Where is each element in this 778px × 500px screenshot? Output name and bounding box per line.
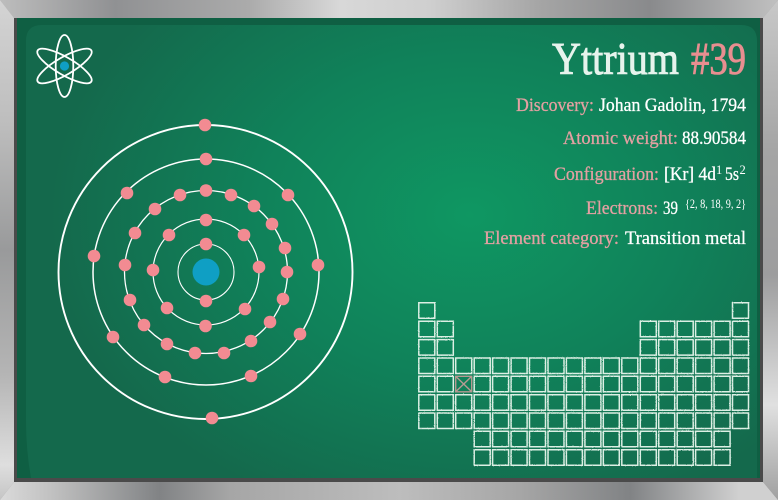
fact: atomic weight: Atomic weight: <box>563 128 678 149</box>
fact: atomic weight <box>563 128 746 149</box>
fact: configuration: 2 <box>740 163 746 177</box>
fact: configuration: Configuration: <box>554 164 659 185</box>
icon: atom <box>33 35 96 97</box>
fact: discovery <box>516 95 746 116</box>
shell 5 electrons <box>199 119 218 424</box>
fact: electrons: Electrons: <box>586 198 658 219</box>
fact: atomic weight: 88.90584 <box>682 128 746 149</box>
shell 2 electrons <box>147 214 265 332</box>
title: Yttrium <box>552 34 679 84</box>
fact: electrons <box>586 196 746 219</box>
fact: element category: Element category: <box>484 228 619 249</box>
fact: configuration <box>554 163 746 185</box>
shell 1 electrons <box>200 238 212 307</box>
title: #39 <box>691 34 746 84</box>
fact: configuration: 1 <box>716 163 722 177</box>
atom shell diagram <box>58 119 352 424</box>
shell 3 electrons <box>119 184 293 359</box>
fact: configuration: [Kr] 4d <box>664 164 716 185</box>
orbit rings <box>58 125 352 419</box>
fact: electrons: {2, 8, 18, 9, 2} <box>685 196 746 211</box>
fact: discovery: Johan Gadolin, 1794 <box>599 95 746 116</box>
nucleus <box>192 258 220 286</box>
fact: electrons: 39 <box>663 198 678 219</box>
shell 4 electrons <box>88 153 324 383</box>
periodic table grid <box>419 303 748 465</box>
fact: configuration: 5s <box>725 164 739 185</box>
fact: discovery: Discovery: <box>516 95 594 116</box>
fact: element category: Transition metal <box>625 228 746 249</box>
fact: element category <box>484 228 746 249</box>
highlighted yttrium cell <box>456 376 472 392</box>
